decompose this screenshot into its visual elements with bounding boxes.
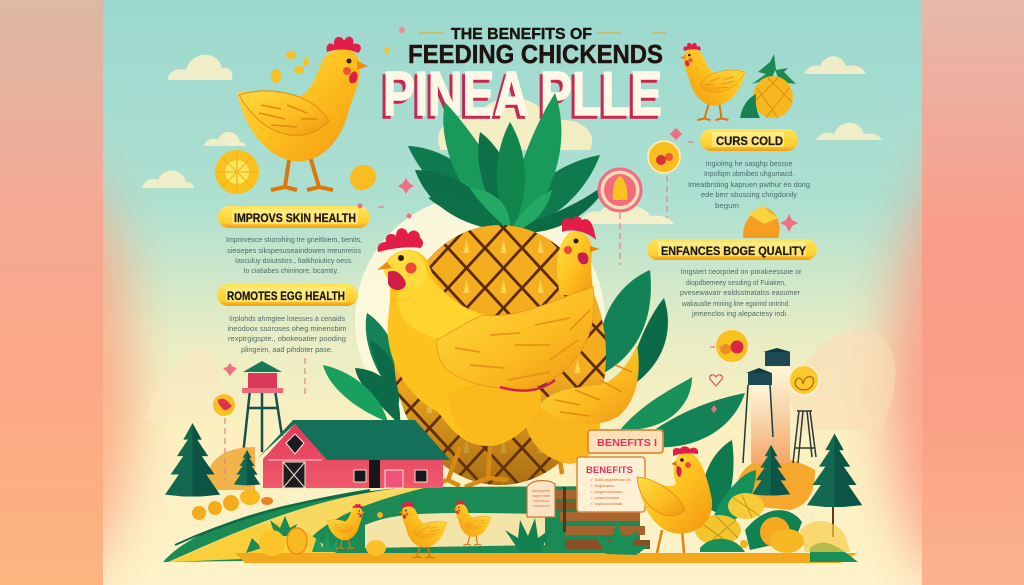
water tower left xyxy=(242,361,283,455)
sign: benefits top xyxy=(588,430,663,453)
tablet sign: nagvenrath xyxy=(532,494,550,498)
heading pill: improves skin health: IMPROVS SKIN HEALTH xyxy=(234,211,356,225)
chicken body xyxy=(388,250,540,446)
tower B xyxy=(763,348,791,463)
connector lines xyxy=(225,142,725,480)
icon: pink badge xyxy=(599,169,641,211)
barn door xyxy=(283,462,305,488)
chick one xyxy=(327,504,365,549)
text block: improves skin health: Io ciatiabes chininore, bcamtiy. xyxy=(244,266,338,275)
tree right large xyxy=(807,434,862,537)
pale patch xyxy=(365,513,545,548)
text block: cures cold: ede berr sbuscing chrigdonily xyxy=(701,190,797,199)
hill highlight stripes xyxy=(175,489,400,545)
sign: benefits top: BENEFITS I xyxy=(597,437,657,449)
title line 2: FEEDING CHICKENDS xyxy=(408,39,663,69)
tablet sign: asimtrsua xyxy=(533,499,549,503)
chicken beak xyxy=(377,262,392,270)
leaves: top right xyxy=(740,94,760,118)
text block: enhances quality: Imgstert ceorpried on porakeessoie or xyxy=(680,267,802,276)
icon: mango left xyxy=(350,165,376,190)
heading pill: enhances quality: ENFANCES BOGE QUALITY xyxy=(661,244,806,258)
text block: enhances quality: wakauolte miriing line egoimd ontrind. xyxy=(681,299,790,308)
barn wall front fill xyxy=(263,426,325,488)
icon: fruit badge right xyxy=(714,329,750,365)
text block: improves skin health: Improvexce stiorohing tre gneitloem, benits, xyxy=(226,235,362,244)
crown of big pineapple xyxy=(408,93,608,233)
barn roof xyxy=(258,420,450,460)
tablet sign: sodupgenth xyxy=(532,489,550,493)
chicken wattle xyxy=(388,271,406,290)
title line 3 shadow: PINEA PLLE xyxy=(380,63,659,132)
pale sun blobs at sides xyxy=(146,329,896,430)
text block: improves skin health: sieoepes sikspesuseaindowes meunreiss xyxy=(227,246,361,255)
plants and fruits right xyxy=(695,440,858,562)
title line 3: PINEA PLLE xyxy=(383,60,662,129)
tower A xyxy=(743,368,773,463)
second chicken behind pineapple xyxy=(557,216,600,296)
text block: promotes egg health: rexptrgigspte., obokeoatier pooding xyxy=(228,334,346,343)
chicken: bottom right xyxy=(637,446,712,553)
tree right small xyxy=(752,445,790,496)
chick two xyxy=(399,502,447,558)
text block: promotes egg health: ineodoox ssoroses oheg minensbim xyxy=(228,324,346,333)
cloud behind title xyxy=(438,98,592,150)
text block: improves skin health: Iasculuy doiutstios., fiatkhoiuticy oess. xyxy=(235,256,353,265)
text block: cures cold: Imeatbrsting kapruen pwthur eo dong xyxy=(688,180,810,189)
falling fruit pieces xyxy=(271,51,309,83)
chicken: top left xyxy=(237,37,368,190)
panel: right side band xyxy=(922,0,1024,585)
sign: benefits list xyxy=(577,457,645,512)
yellow strip xyxy=(168,488,424,562)
text block: cures cold: begum xyxy=(715,201,739,210)
right background towers xyxy=(738,348,816,510)
heading pill: cures cold: CURS COLD xyxy=(716,134,783,148)
fruit pile left xyxy=(192,489,273,520)
pineapple: top right xyxy=(752,54,796,118)
ground xyxy=(163,486,858,563)
sun glow behind chickens xyxy=(355,195,605,445)
text block: enhances quality: pvesewavarr ealdsstnatalss easumer xyxy=(680,288,800,297)
chicken comb xyxy=(378,228,423,252)
text block: enhances quality: diopdbemeey sesding of Fuiaken, xyxy=(686,278,786,287)
panel: left side band xyxy=(0,0,103,585)
chicken neck feathers xyxy=(398,265,482,338)
sign list: ✓ pipaunbenses xyxy=(590,495,619,500)
title line 1: THE BENEFITS OF xyxy=(451,26,592,43)
heading pill: promotes egg health: ROMOTES EGG HEALTH xyxy=(227,289,345,303)
heading pill: enhances quality xyxy=(647,239,817,260)
title decorations xyxy=(384,27,666,53)
plants by fence xyxy=(505,518,650,555)
heading pill: promotes egg health xyxy=(217,284,358,306)
upper green hill xyxy=(163,486,640,562)
sign list: ✓ sapiuvonuinsas xyxy=(590,501,622,506)
chicken wing xyxy=(437,287,594,389)
tree left small xyxy=(234,450,260,485)
hill behind barn xyxy=(205,447,255,490)
orange band xyxy=(235,553,858,563)
text block: enhances quality xyxy=(680,267,802,318)
barn xyxy=(258,420,450,488)
orange hill xyxy=(738,458,815,510)
heart icon xyxy=(710,375,722,386)
text block: promotes egg health: Iirplohds ahmgtee lotesses à cenaids xyxy=(229,314,345,323)
text block: enhances quality: jemenclos ing alepactesy indi. xyxy=(691,309,788,318)
clouds xyxy=(142,55,882,224)
icon: small badge left xyxy=(213,394,235,416)
text block: cures cold: Ingiolmg he sasghp bessse xyxy=(706,159,792,168)
tree left large xyxy=(165,423,220,496)
sign list: ✓ Solid pippineman 39 xyxy=(590,477,631,482)
fence xyxy=(555,487,650,549)
small stand xyxy=(793,411,816,463)
main chicken xyxy=(377,228,639,487)
heading pill: improves skin health xyxy=(218,206,370,228)
icon: mango on heading xyxy=(743,206,780,238)
title xyxy=(380,26,663,132)
sparkle decorations xyxy=(223,128,798,413)
text block: cures cold xyxy=(688,159,810,210)
fruit and plant foreground left xyxy=(246,512,386,556)
sign list xyxy=(590,477,631,506)
text block: promotes egg health xyxy=(228,314,346,354)
sign list: ✓ Nejptcausu xyxy=(590,483,614,488)
icon: fruit badge top xyxy=(647,140,681,174)
chicken belly xyxy=(448,383,541,446)
chick three xyxy=(453,500,491,545)
chicken head xyxy=(384,250,427,288)
yellow field xyxy=(170,522,340,562)
second tail xyxy=(540,345,639,424)
icon: citrus slice xyxy=(215,150,259,194)
red line under wing xyxy=(500,380,555,391)
big pineapple xyxy=(390,225,610,487)
tablet sign: vreasound xyxy=(533,504,549,508)
big background leaves xyxy=(323,270,745,447)
tablet sign xyxy=(527,481,555,517)
barn walls xyxy=(263,424,443,488)
sign heading: BENEFITS xyxy=(586,465,633,476)
text block: improves skin health xyxy=(226,235,362,275)
text block: cures cold: Inpofiqm obmibes uhgumacd. xyxy=(704,169,794,178)
chicken legs xyxy=(420,447,562,487)
icon: chicken badge right xyxy=(788,365,820,397)
text block: promotes egg health: plingeim, aad pihdoter pase. xyxy=(241,345,333,354)
sign list: ✓ pipgonupinoses xyxy=(590,489,622,494)
chicken: top right xyxy=(680,43,796,120)
second belly xyxy=(524,400,600,464)
heading pill: cures cold xyxy=(700,129,798,151)
